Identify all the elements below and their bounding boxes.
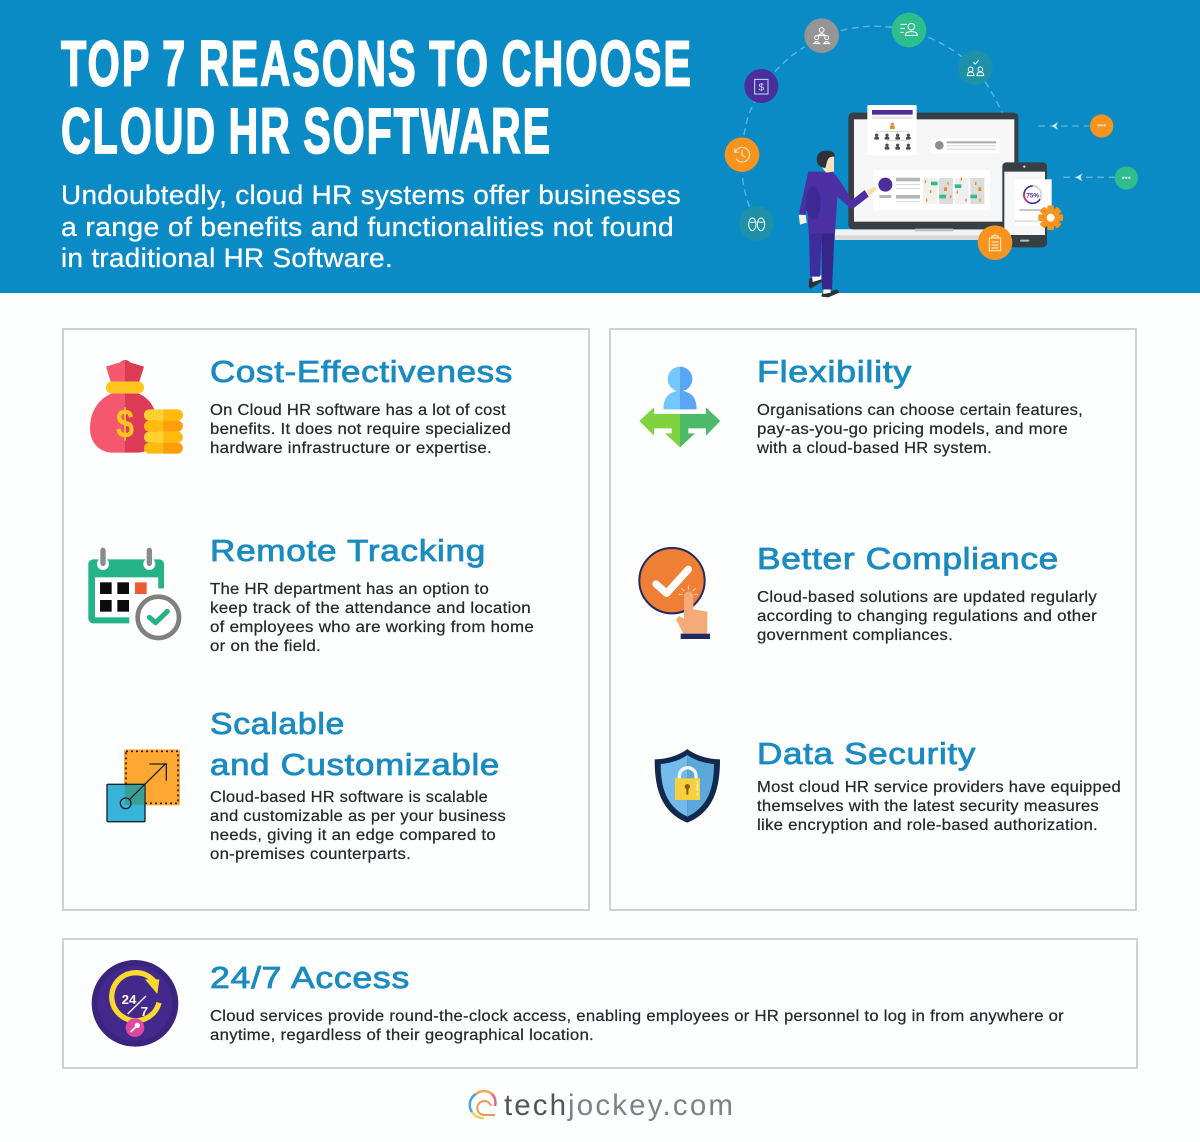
icon: 24/7 clock badge — [92, 960, 178, 1047]
description: like encryption and role-based authorization. — [757, 817, 1098, 834]
panel: 24/7 access — [63, 939, 1137, 1068]
wordmark: jockey.com — [567, 1089, 733, 1122]
description: On Cloud HR software has a lot of cost — [210, 402, 506, 419]
icon: green person list circle — [892, 13, 926, 47]
icon: money bag with coins — [90, 360, 183, 454]
title: CLOUD HR SOFTWARE — [61, 95, 552, 167]
arrow: pointing left to laptop — [1052, 122, 1058, 130]
description — [210, 1008, 1064, 1044]
description: according to changing regulations and other — [757, 608, 1097, 625]
icon: 24/7 clock badge: 7 — [141, 1004, 148, 1019]
icon: teal people check circle — [958, 50, 993, 85]
subtitle — [61, 180, 681, 273]
subtitle: a range of benefits and functionalities not found — [61, 212, 674, 242]
description: Cloud-based solutions are updated regularly — [757, 589, 1097, 606]
icon: 24/7 clock badge: 24 — [122, 992, 137, 1007]
icon: money bag with coins: $ — [116, 401, 134, 447]
icon: resize squares — [107, 749, 180, 822]
reason: data security — [655, 737, 1121, 834]
title: TOP 7 REASONS TO CHOOSE — [61, 28, 693, 100]
heading — [210, 707, 500, 782]
description: with a cloud-based HR system. — [756, 440, 992, 457]
subtitle: Undoubtedly, cloud HR systems offer businesses — [61, 180, 681, 210]
description: anytime, regardless of their geographical location. — [210, 1027, 594, 1044]
description: pay-as-you-go pricing models, and more — [757, 421, 1068, 438]
icon: purple receipt circle: $ — [759, 83, 765, 94]
description: and customizable as per your business — [210, 808, 506, 825]
heading: Scalable — [210, 707, 345, 741]
description — [210, 581, 534, 655]
description: Organisations can choose certain features, — [757, 402, 1083, 419]
header banner — [0, 0, 1200, 297]
icon: orange dots circle — [1090, 114, 1113, 138]
icon: orange history circle — [725, 137, 759, 172]
footer logo: techjockey.com — [470, 1089, 733, 1122]
arrow: pointing left to tablet — [1076, 173, 1083, 181]
description: of employees who are working from home — [210, 619, 534, 636]
icon: green dots circle: ••• — [1122, 172, 1131, 182]
tablet — [1002, 162, 1052, 247]
heading: 24/7 Access — [210, 961, 410, 995]
reason: remote tracking — [88, 534, 534, 655]
icon: green dots circle — [1115, 166, 1138, 190]
icon: logo mark — [470, 1091, 495, 1118]
description: keep track of the attendance and location — [210, 600, 531, 617]
wordmark: tech — [504, 1089, 566, 1122]
reason: scalable and customizable — [107, 707, 506, 863]
heading: Cost-Effectiveness — [210, 355, 513, 389]
icon: calendar with check — [88, 548, 179, 638]
description: themselves with the latest security measures — [757, 798, 1099, 815]
description: needs, giving it an edge compared to — [210, 827, 496, 844]
icon: gray org circle — [804, 18, 839, 53]
description: or on the field. — [210, 638, 321, 655]
tablet: 75% — [1026, 192, 1039, 199]
description: The HR department has an option to — [210, 581, 489, 598]
heading: Better Compliance — [757, 542, 1059, 576]
description: hardware infrastructure or expertise. — [210, 440, 492, 457]
org chart card — [867, 105, 917, 155]
subtitle: in traditional HR Software. — [61, 243, 393, 273]
description — [757, 779, 1121, 834]
schedule card — [873, 170, 990, 210]
profile strip card — [931, 138, 999, 153]
title — [61, 28, 693, 167]
laptop — [835, 113, 1018, 240]
description: Most cloud HR service providers have equipped — [757, 779, 1121, 796]
panel: left reasons — [63, 329, 589, 910]
heading: Flexibility — [757, 355, 912, 389]
heading: and Customizable — [210, 748, 500, 782]
icon: teal sandals circle — [739, 206, 774, 241]
description: benefits. It does not require specialized — [210, 421, 511, 438]
reason: flexibility — [639, 355, 1083, 457]
description: Cloud-based HR software is scalable — [210, 789, 488, 806]
heading: Data Security — [757, 737, 976, 771]
description: on-premises counterparts. — [210, 846, 411, 863]
icon: person with arrows — [639, 367, 720, 447]
presenter figure — [799, 151, 877, 297]
reason: cost-effectiveness — [90, 355, 513, 457]
icon: shield with padlock — [655, 749, 720, 823]
description — [757, 589, 1097, 644]
reason: better compliance — [639, 542, 1097, 644]
icon: gear — [1038, 205, 1063, 230]
icon: purple receipt circle — [744, 69, 778, 103]
heading: Remote Tracking — [210, 534, 486, 568]
illustration: HR software on laptop with presenter — [725, 13, 1138, 297]
description: government compliances. — [757, 627, 953, 644]
description — [210, 402, 511, 457]
dashed arc connectors — [743, 26, 1115, 207]
icon: orange dots circle: ••• — [1097, 120, 1106, 130]
description — [210, 789, 506, 863]
icon: orange clipboard circle — [978, 225, 1012, 260]
icon: check button with hand — [639, 548, 710, 639]
description — [756, 402, 1083, 457]
description: Cloud services provide round-the-clock access, enabling employees or HR personnel to log in from anywhere or — [210, 1008, 1064, 1025]
panel: right reasons — [610, 329, 1136, 910]
